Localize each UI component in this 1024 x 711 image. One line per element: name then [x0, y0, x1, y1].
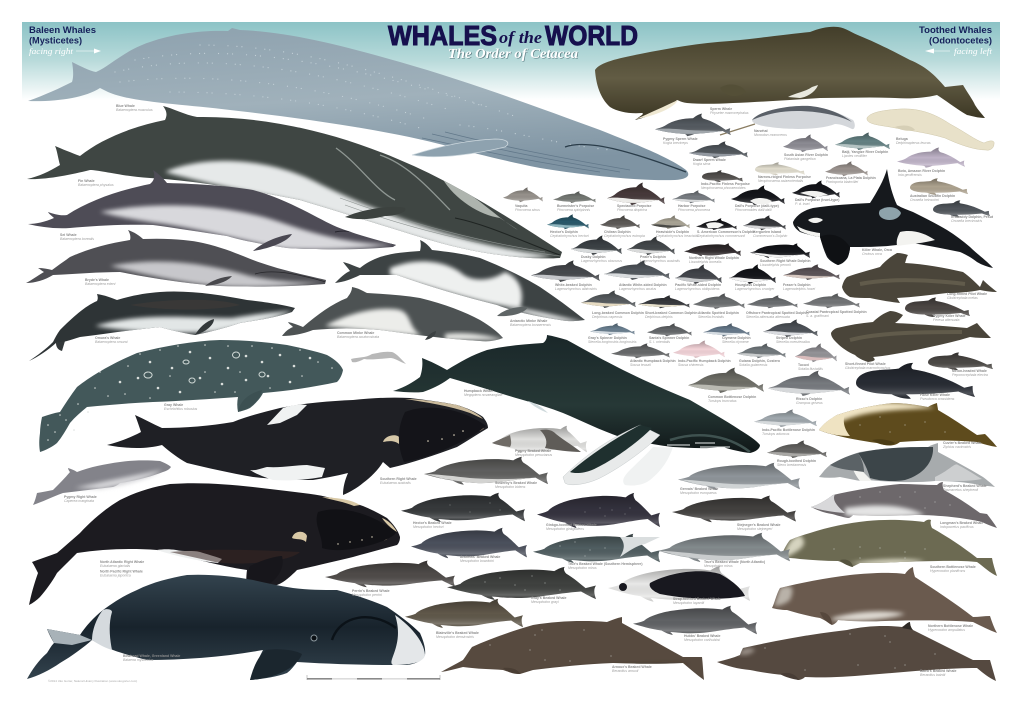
- whale: southern bottlenose whale: [781, 520, 997, 576]
- whale: Dall's porpoise truei: P. d. truei: [795, 202, 810, 206]
- whale: short-finned pilot whale: Short-finned Pilot Whale: [845, 362, 886, 366]
- whale: Guiana dolphin: Sotalia guianensis: [739, 363, 768, 367]
- whale: Gray's spinner dolphin: Gray's Spinner Dolphin: [588, 336, 627, 340]
- whale: harbor porpoise: [672, 190, 715, 212]
- whale: Hubbs' beaked whale: Mesoplodon carlhubbsi: [684, 638, 720, 642]
- whale: white-beaked dolphin: White-beaked Dolphin: [555, 283, 592, 287]
- whale: offshore pantropical spotted dolphin: [746, 295, 809, 319]
- whale: common bottlenose dolphin: [688, 368, 764, 403]
- whale: Amazon river dolphin: Inia geoffrensis: [898, 173, 922, 177]
- whale: pygmy right whale: Caperea marginata: [64, 499, 94, 503]
- whale: finless porpoise: Neophocaena phocaenoides: [701, 186, 746, 190]
- whale: Clymene dolphin: [703, 323, 751, 344]
- whale: Peale's dolphin: Lagenorhynchus australis: [640, 259, 680, 263]
- heading: baleen whales: facing right: [29, 46, 74, 56]
- whale: Shepherd's beaked whale: [819, 443, 995, 492]
- whale: melon-headed whale: Peponocephala electra: [952, 373, 988, 377]
- whale: Sowerby's beaked whale: Mesoplodon bidens: [495, 485, 526, 489]
- whale: ginkgo-toothed beaked whale: [537, 493, 660, 531]
- whale: blue whale: [28, 28, 688, 180]
- whale: spectacled porpoise: [607, 183, 665, 212]
- whale: Chilean dolphin: Cephalorhynchus eutropia: [604, 234, 645, 238]
- whale: sperm whale: Physeter macrocephalus: [710, 111, 749, 115]
- whale: pygmy sperm whale: [655, 114, 731, 145]
- heading: toothed whales: (Odontocetes): [929, 36, 992, 46]
- whale: pygmy sperm whale: Pygmy Sperm Whale: [663, 137, 698, 141]
- whale: orca: Killer Whale, Orca: [862, 248, 892, 252]
- whale: humpback whale: Humpback Whale: [464, 389, 493, 393]
- whale: Shepherd's beaked whale: Tasmacetus shepherdi: [943, 488, 978, 492]
- whale: pygmy sperm whale: Kogia breviceps: [663, 141, 688, 145]
- whale: Indo-Pacific humpback dolphin: Indo-Pacific Humpback Dolphin: [678, 359, 731, 363]
- whale: tucuxi: [795, 343, 837, 371]
- whale: striped dolphin: Striped Dolphin: [776, 336, 802, 340]
- subtitle: The Order of Cetacea: [449, 47, 579, 62]
- whale: North Atlantic right whale: North Atlantic Right Whale: [100, 560, 144, 564]
- whale: southern right whale: Southern Right Whale: [380, 477, 417, 481]
- whale: false killer whale: Pseudorca crassidens: [920, 397, 955, 401]
- whale: Perrin's beaked whale: [325, 561, 455, 597]
- whale: sperm whale: Sperm Whale: [710, 107, 732, 111]
- whale: franciscana: Pontoporia blainvillei: [826, 180, 858, 184]
- whale: Atlantic spotted dolphin: Atlantic Spotted Dolphin: [698, 311, 739, 315]
- swimmer scale figure: [351, 352, 406, 364]
- whale: pygmy killer whale: Pygmy Killer Whale: [933, 314, 965, 318]
- whale: humpback whale: Megaptera novaeangliae: [464, 393, 503, 397]
- whale: Blainville's beaked whale: Blainville's Beaked Whale: [436, 631, 479, 635]
- whale: Hector's beaked whale: [401, 493, 525, 529]
- whale: Australian snubfin dolphin: [910, 178, 968, 202]
- whale: hourglass-patterned teal dolphin: Hector's Dolphin: [550, 230, 578, 234]
- whale: Hubbs' beaked whale: [633, 606, 757, 642]
- whale: Heaviside's dolphin: [651, 215, 699, 238]
- whale: rough-toothed dolphin: [767, 440, 827, 467]
- whale: Irrawaddy dolphin: Irrawaddy Dolphin, Pesut: [951, 215, 993, 219]
- whale: northern right whale dolphin: [684, 243, 741, 264]
- whale: Arnoux's beaked whale: Arnoux's Beaked Whale: [612, 665, 652, 669]
- whale: True's beaked whale north atlantic: [658, 533, 790, 568]
- whale: beluga: Beluga: [896, 137, 908, 141]
- heading: baleen whales: [29, 25, 101, 56]
- whale: Indo-Pacific bottlenose dolphin: Tursiops aduncus: [762, 432, 790, 436]
- whale: Atlantic humpback dolphin: [611, 343, 676, 367]
- whale: Omura's whale: Omura's Whale: [95, 336, 120, 340]
- title: of the: [499, 28, 542, 47]
- whale: Hector's beaked whale: Hector's Beaked Whale: [413, 521, 452, 525]
- whale: Hubbs' beaked whale: Hubbs' Beaked Whale: [684, 634, 720, 638]
- whale: orca: Orcinus orca: [862, 252, 882, 256]
- whale: Stejneger's beaked whale: Mesoplodon stejnegeri: [737, 527, 772, 531]
- whale: Indo-Pacific humpback dolphin: [673, 340, 731, 367]
- whale: long-finned pilot whale: Long-finned Pilot Whale: [947, 292, 987, 296]
- whale: common minke whale: Balaenoptera acutorostrata: [337, 335, 379, 339]
- whale: northern bottlenose whale: Northern Bottlenose Whale: [928, 624, 973, 628]
- whale: True's beaked whale north atlantic: Mesoplodon mirus: [704, 564, 733, 568]
- whale: gray whale: Gray Whale: [164, 403, 183, 407]
- whale: Stejneger's beaked whale: [672, 496, 796, 531]
- whale: sperm whale: [595, 27, 985, 120]
- whale: South Asian river dolphin: Platanista gangetica: [784, 157, 816, 161]
- whale: vaquita: [503, 187, 543, 212]
- whale: tucuxi: Tucuxi: [798, 363, 809, 367]
- whale: southern right whale dolphin: [750, 243, 811, 267]
- whale: Antarctic minke whale: [335, 240, 585, 327]
- whale: sei whale: [28, 170, 396, 251]
- whale: white-beaked dolphin: [531, 261, 600, 291]
- whale: Arnoux's beaked whale: Berardius arnuxii: [612, 669, 638, 673]
- whale: True's beaked whale southern: [533, 534, 660, 570]
- whale: blue whale: Balaenoptera musculus: [116, 108, 153, 112]
- whale: Commerson's dolphin: [696, 218, 755, 238]
- whale: Pacific white-sided dolphin: [675, 264, 722, 291]
- whale: spectacled porpoise: Phocoena dioptrica: [617, 208, 647, 212]
- whale: gray whale: Eschrichtius robustus: [164, 407, 198, 411]
- whale: pygmy killer whale: [905, 298, 970, 322]
- whale: orca: [793, 169, 993, 268]
- whale: Longman's beaked whale: [811, 482, 997, 529]
- whale: melon-headed whale: Melon-headed Whale: [952, 369, 987, 373]
- whale: fin whale: Fin Whale: [78, 179, 95, 183]
- whale: Shepherd's beaked whale: Shepherd's Beaked Whale: [943, 484, 987, 488]
- whale: bowhead whale: [27, 575, 425, 680]
- whale: Indo-Pacific bottlenose dolphin: Indo-Pacific Bottlenose Dolphin: [762, 428, 815, 432]
- whale: Peale's dolphin: [627, 236, 680, 263]
- whale: short-beaked common dolphin: Short-beaked Common Dolphin: [645, 311, 698, 315]
- whale: dusky dolphin: [571, 236, 622, 263]
- whale: Dall's porpoise: Dall's Porpoise (dalli-type): [735, 204, 779, 208]
- whale: Atlantic white-sided dolphin: Lagenorhynchus acutus: [619, 287, 656, 291]
- whale: long-beaked common dolphin: [581, 290, 644, 319]
- whale: hourglass dolphin: [729, 264, 776, 291]
- whale: blue whale: Blue Whale: [116, 104, 135, 108]
- whale: Bryde's whale: Bryde's Whale: [85, 278, 109, 282]
- whale: narrow-ridged finless porpoise: [755, 162, 811, 183]
- whale: common minke whale: [282, 287, 505, 341]
- whale: fin whale: Balaenoptera physalus: [78, 183, 114, 187]
- whale: Baird's beaked whale: [717, 622, 996, 681]
- whale: Risso's dolphin: Grampus griseus: [796, 401, 823, 405]
- whale: Heaviside's dolphin: Cephalorhynchus heavisidii: [656, 234, 699, 238]
- whale: southern right whale: Eubalaena australis: [380, 481, 411, 485]
- subtitle: The Order of Cetacea: [448, 46, 578, 61]
- whale: Australian snubfin dolphin: Orcaella heinsohni: [910, 198, 939, 202]
- whale: pygmy right whale: Pygmy Right Whale: [64, 495, 97, 499]
- whale: narwhal: Monodon monoceros: [754, 133, 787, 137]
- whale: narwhal: Narwhal: [754, 129, 768, 133]
- whale: Heaviside's dolphin: Heaviside's Dolphin: [656, 230, 689, 234]
- whale: strap-toothed beaked whale: [608, 566, 750, 605]
- whale: Atlantic white-sided dolphin: [604, 260, 670, 291]
- whale: Fraser's dolphin: Fraser's Dolphin: [783, 283, 810, 287]
- whale: Omura's whale: [29, 292, 295, 361]
- whale: southern right whale dolphin: Southern Right Whale Dolphin: [760, 259, 811, 263]
- whale: Atlantic spotted dolphin: Stenella frontalis: [698, 315, 724, 319]
- whale: Atlantic spotted dolphin: [693, 293, 745, 319]
- whale: Gray's beaked whale: Mesoplodon grayi: [531, 600, 559, 604]
- whale: Cuvier's beaked whale: [815, 402, 997, 449]
- whale: strap-toothed beaked whale: Strap-toothed Beaked Whale: [673, 597, 721, 601]
- whale: Irrawaddy dolphin: Orcaella brevirostris: [951, 219, 982, 223]
- whale: Atlantic humpback dolphin: Atlantic Humpback Dolphin: [630, 359, 676, 363]
- whale: Baird's beaked whale: Baird's Beaked Whale: [920, 669, 956, 673]
- whale: striped dolphin: Stenella coeruleoalba: [776, 340, 810, 344]
- whale: common minke whale: Common Minke Whale: [337, 331, 374, 335]
- whale: Hector's beaked whale: Mesoplodon hectori: [413, 525, 444, 529]
- whale: humpback whale: [393, 335, 760, 485]
- whale: fin whale: [27, 106, 562, 259]
- whale: Andrews' beaked whale: [411, 528, 527, 563]
- whale: Burmeister's porpoise: [553, 191, 596, 212]
- whale: Amazon river dolphin: [897, 148, 965, 177]
- whale: northern right whale dolphin: Lissodelphis borealis: [689, 260, 722, 264]
- whale: Dall's porpoise: [731, 186, 785, 212]
- whale: southern right whale dolphin: Lissodelphis peronii: [760, 263, 791, 267]
- whale: Blainville's beaked whale: Mesoplodon densirostris: [436, 635, 474, 639]
- whale: Santa's spinner dolphin: S. l. orientalis: [649, 340, 670, 344]
- copyright credit: ©2014 Uko Gorter, Natural History Illustration (www.ukogorter.com): [48, 679, 137, 683]
- whale: franciscana: Franciscana, La Plata Dolphin: [826, 176, 876, 180]
- whale: spectacled porpoise: Spectacled Porpoise: [617, 204, 651, 208]
- whale: short-finned pilot whale: Globicephala macrorhynchus: [845, 366, 891, 370]
- whale: Kerguelen Commerson's dolphin: [743, 215, 787, 238]
- whale: Santa's spinner dolphin: [647, 323, 692, 344]
- whale: Baird's beaked whale: Berardius bairdii: [920, 673, 946, 677]
- whale: finless porpoise: Indo-Pacific Finless Porpoise: [701, 182, 750, 186]
- whale: True's beaked whale southern: True's Beaked Whale (Southern Hemisphere): [568, 562, 643, 566]
- whale: dusky dolphin: Dusky Dolphin: [581, 255, 606, 259]
- whale: rough-toothed dolphin: Steno bredanensis: [777, 463, 806, 467]
- whale: offshore pantropical spotted dolphin: Offshore Pantropical Spotted Dolphin: [746, 311, 809, 315]
- heading: toothed whales: [919, 25, 993, 56]
- whale: ginkgo-toothed beaked whale: Ginkgo-toothed Beaked Whale: [546, 523, 597, 527]
- whale: Longman's beaked whale: Indopacetus pacificus: [940, 525, 974, 529]
- whale: short-finned pilot whale: [831, 311, 991, 370]
- whale: offshore pantropical spotted dolphin: Stenella attenuata attenuata: [746, 315, 790, 319]
- whale: Chilean dolphin: [600, 215, 645, 238]
- whale: northern bottlenose whale: [772, 567, 997, 633]
- whale: Indo-Pacific bottlenose dolphin: [754, 409, 817, 436]
- whale: Australian snubfin dolphin: Australian Snubfin Dolphin: [910, 194, 955, 198]
- whale: strap-toothed beaked whale: Mesoplodon layardii: [673, 601, 704, 605]
- whale: beluga: Delphinapterus leucas: [896, 141, 931, 145]
- whale: pygmy killer whale: Feresa attenuata: [933, 318, 960, 322]
- whale: Kerguelen Commerson's dolphin: Commerson's Dolphin: [753, 234, 787, 238]
- whale: Gervais' beaked whale: Gervais' Beaked Whale: [680, 487, 718, 491]
- whale: Perrin's beaked whale: Perrin's Beaked Whale: [352, 589, 390, 593]
- whale: Sowerby's beaked whale: [424, 457, 548, 489]
- whale: northern right whale dolphin: Northern Right Whale Dolphin: [689, 256, 739, 260]
- whale: tucuxi: Sotalia fluviatilis: [798, 367, 823, 371]
- whale: Cuvier's beaked whale: Ziphius cavirostris: [942, 445, 971, 449]
- whale: Clymene dolphin: Stenella clymene: [722, 340, 749, 344]
- whale: Gray's spinner dolphin: [588, 323, 637, 344]
- whale: North Atlantic right whale: Eubalaena glacialis: [100, 564, 130, 568]
- whale: vaquita: Phocoena sinus: [515, 208, 540, 212]
- whale: rough-toothed dolphin: Rough-toothed Dolphin: [777, 459, 816, 463]
- whale: gray whale: [39, 340, 343, 452]
- heading: baleen whales: Baleen Whales: [29, 25, 96, 36]
- whale: Dall's porpoise truei: Dall's Porpoise (truei-type): [795, 198, 839, 202]
- heading: toothed whales: Toothed Whales: [919, 25, 992, 36]
- heading: toothed whales: facing left: [954, 46, 993, 56]
- whale: pygmy beaked whale: [492, 426, 587, 457]
- whale: Santa's spinner dolphin: Santa's Spinner Dolphin: [649, 336, 689, 340]
- whale: harbor porpoise: Phocoena phocoena: [678, 208, 710, 212]
- whale: Yangtze river dolphin: Lipotes vexillifer: [842, 154, 868, 158]
- whale: Sowerby's beaked whale: Sowerby's Beaked Whale: [495, 481, 537, 485]
- whale: Stejneger's beaked whale: Stejneger's Beaked Whale: [737, 523, 780, 527]
- whale: Gray's beaked whale: [447, 567, 596, 604]
- whale: franciscana: [825, 161, 876, 184]
- whale: bowhead whale: Balaena mysticetus: [123, 658, 154, 662]
- whale: short-beaked common dolphin: Delphinus delphis: [645, 315, 673, 319]
- whale: Gray's spinner dolphin: Stenella longirostris longirostris: [588, 340, 637, 344]
- whale: Burmeister's porpoise: Phocoena spinipinnis: [557, 208, 590, 212]
- whale: Clymene dolphin: Clymene Dolphin: [722, 336, 751, 340]
- whale: Yangtze river dolphin: [835, 132, 890, 158]
- whale: Risso's dolphin: [768, 371, 850, 405]
- whale: pygmy right whale: [33, 460, 171, 505]
- whale: narrow-ridged finless porpoise: Narrow-ridged Finless Porpoise: [758, 175, 811, 179]
- whale: Risso's dolphin: Risso's Dolphin: [796, 397, 822, 401]
- whale: Pacific white-sided dolphin: Pacific White-sided Dolphin: [675, 283, 721, 287]
- title: WHALES: [388, 20, 497, 51]
- whale: Atlantic humpback dolphin: Sousa teuszii: [630, 363, 651, 367]
- whale: bowhead whale: Bowhead Whale, Greenland Whale: [123, 654, 180, 658]
- whale: finless porpoise: [701, 170, 750, 190]
- whale: Gervais' beaked whale: [678, 463, 800, 495]
- heading: baleen whales: (Mysticetes): [29, 36, 82, 46]
- whale: ginkgo-toothed beaked whale: Mesoplodon ginkgodens: [546, 527, 584, 531]
- whale: dwarf sperm whale: [689, 141, 748, 166]
- whale: Amazon river dolphin: Boto, Amazon River Dolphin: [898, 169, 945, 173]
- whale: Arnoux's beaked whale: [441, 617, 704, 680]
- whale: long-beaked common dolphin: Long-beaked Common Dolphin: [592, 311, 644, 315]
- whale: long-finned pilot whale: Globicephala melas: [947, 296, 978, 300]
- whale: Fraser's dolphin: Lagenodelphis hosei: [783, 287, 815, 291]
- whale: coastal pantropical spotted dolphin: S. a. graffmani: [806, 314, 829, 318]
- whale: South Asian river dolphin: [783, 134, 828, 161]
- whale: sei whale: Balaenoptera borealis: [60, 237, 94, 241]
- whale: pygmy beaked whale: Mesoplodon peruvianus: [515, 453, 552, 457]
- whale: Gray's beaked whale: Gray's Beaked Whale: [531, 596, 566, 600]
- whale: Bryde's whale: Balaenoptera edeni: [85, 282, 116, 286]
- whale: southern bottlenose whale: Hyperoodon planifrons: [930, 569, 965, 573]
- whale: melon-headed whale: [928, 352, 993, 377]
- whale: Kerguelen Commerson's dolphin: Kerguelen Island: [753, 230, 781, 234]
- whale: Burmeister's porpoise: Burmeister's Porpoise: [557, 204, 594, 208]
- whale: True's beaked whale southern: Mesoplodon mirus: [568, 566, 597, 570]
- whale: Dall's porpoise truei: [792, 180, 840, 206]
- whale: northern bottlenose whale: Hyperoodon ampullatus: [928, 628, 965, 632]
- whale: hourglass dolphin: Lagenorhynchus cruciger: [735, 287, 775, 291]
- sky gradient header band: [22, 22, 1000, 100]
- whale: Yangtze river dolphin: Baiji, Yangtze River Dolphin: [842, 150, 888, 154]
- whale: North Atlantic right whale: North Pacific Right Whale: [100, 570, 143, 574]
- whale: Irrawaddy dolphin: [933, 200, 994, 223]
- whale: coastal pantropical spotted dolphin: Coastal Pantropical Spotted Dolphin: [806, 310, 867, 314]
- whale: Commerson's dolphin: S. American Commerson's Dolphin: [697, 230, 755, 234]
- whale: long-beaked common dolphin: Delphinus capensis: [592, 315, 623, 319]
- whale: hourglass-patterned teal dolphin: [547, 214, 589, 238]
- whale: South Asian river dolphin: South Asian River Dolphin: [784, 153, 828, 157]
- whale: false killer whale: [856, 363, 975, 401]
- whale: Pacific white-sided dolphin: Lagenorhynchus obliquidens: [675, 287, 720, 291]
- whale: vaquita: Vaquita: [515, 204, 527, 208]
- whale: Antarctic minke whale: Balaenoptera bonaerensis: [510, 323, 551, 327]
- whale: Guiana dolphin: Guiana Dolphin, Costero: [739, 359, 780, 363]
- whale: common bottlenose dolphin: Tursiops truncatus: [708, 399, 737, 403]
- whale: Guiana dolphin: [737, 343, 786, 367]
- whale: Cuvier's beaked whale: Cuvier's Beaked Whale: [943, 441, 981, 445]
- whale: Blainville's beaked whale: [405, 599, 523, 639]
- whale: Andrews' beaked whale: Andrews' Beaked Whale: [460, 555, 500, 559]
- whale: false killer whale: False Killer Whale: [920, 393, 950, 397]
- whale: Atlantic white-sided dolphin: Atlantic White-sided Dolphin: [619, 283, 667, 287]
- whale: sei whale: Sei Whale: [60, 233, 77, 237]
- whale: Indo-Pacific humpback dolphin: Sousa chinensis: [678, 363, 704, 367]
- whale: Dall's porpoise: Phocoenoides dalli dalli: [735, 208, 772, 212]
- whale: southern right whale: [107, 398, 488, 495]
- whale: long-finned pilot whale: [842, 253, 997, 303]
- whale: striped dolphin: [763, 319, 818, 344]
- whale: common bottlenose dolphin: Common Bottlenose Dolphin: [708, 395, 756, 399]
- whale: Andrews' beaked whale: Mesoplodon bowdoini: [460, 559, 494, 563]
- whale: coastal pantropical spotted dolphin: [803, 293, 867, 318]
- whale: North Atlantic right whale: [29, 483, 400, 605]
- scale bar: [307, 675, 440, 680]
- whale: True's beaked whale north atlantic: True's Beaked Whale (North Atlantic): [704, 560, 765, 564]
- whale: Commerson's dolphin: Cephalorhynchus commersonii: [697, 234, 745, 238]
- whale: pygmy beaked whale: Pygmy Beaked Whale: [515, 449, 551, 453]
- whale: Longman's beaked whale: Longman's Beaked Whale: [940, 521, 983, 525]
- whale: North Atlantic right whale: Eubalaena japonica: [100, 574, 131, 578]
- whale: hourglass dolphin: Hourglass Dolphin: [735, 283, 766, 287]
- whale: narrow-ridged finless porpoise: Neophocaena asiaeorientalis: [758, 179, 803, 183]
- whale: Bryde's whale: [26, 230, 326, 287]
- whale: beluga: [867, 109, 994, 150]
- whale: Gervais' beaked whale: Mesoplodon europaeus: [680, 491, 717, 495]
- whale: harbor porpoise: Harbor Porpoise: [678, 204, 705, 208]
- whale: narwhal: [720, 106, 855, 137]
- whale: hourglass-patterned teal dolphin: Cephalorhynchus hectori: [550, 234, 589, 238]
- whale: white-beaked dolphin: Lagenorhynchus albirostris: [555, 287, 597, 291]
- title: WORLD: [545, 20, 638, 51]
- whale: southern bottlenose whale: Southern Bottlenose Whale: [930, 565, 976, 569]
- whale: Omura's whale: Balaenoptera omurai: [95, 340, 128, 344]
- title: [388, 20, 638, 51]
- whale: Peale's dolphin: Peale's Dolphin: [640, 255, 666, 259]
- whale: Chilean dolphin: Chilean Dolphin: [604, 230, 631, 234]
- whale: short-beaked common dolphin: [638, 295, 698, 319]
- whale: Fraser's dolphin: [783, 264, 840, 291]
- whale: dwarf sperm whale: Dwarf Sperm Whale: [693, 158, 726, 162]
- whale: Antarctic minke whale: Antarctic Minke Whale: [510, 319, 547, 323]
- whale: dusky dolphin: Lagenorhynchus obscurus: [581, 259, 622, 263]
- whale: dwarf sperm whale: Kogia sima: [693, 162, 710, 166]
- whale: Perrin's beaked whale: Mesoplodon perrini: [352, 593, 382, 597]
